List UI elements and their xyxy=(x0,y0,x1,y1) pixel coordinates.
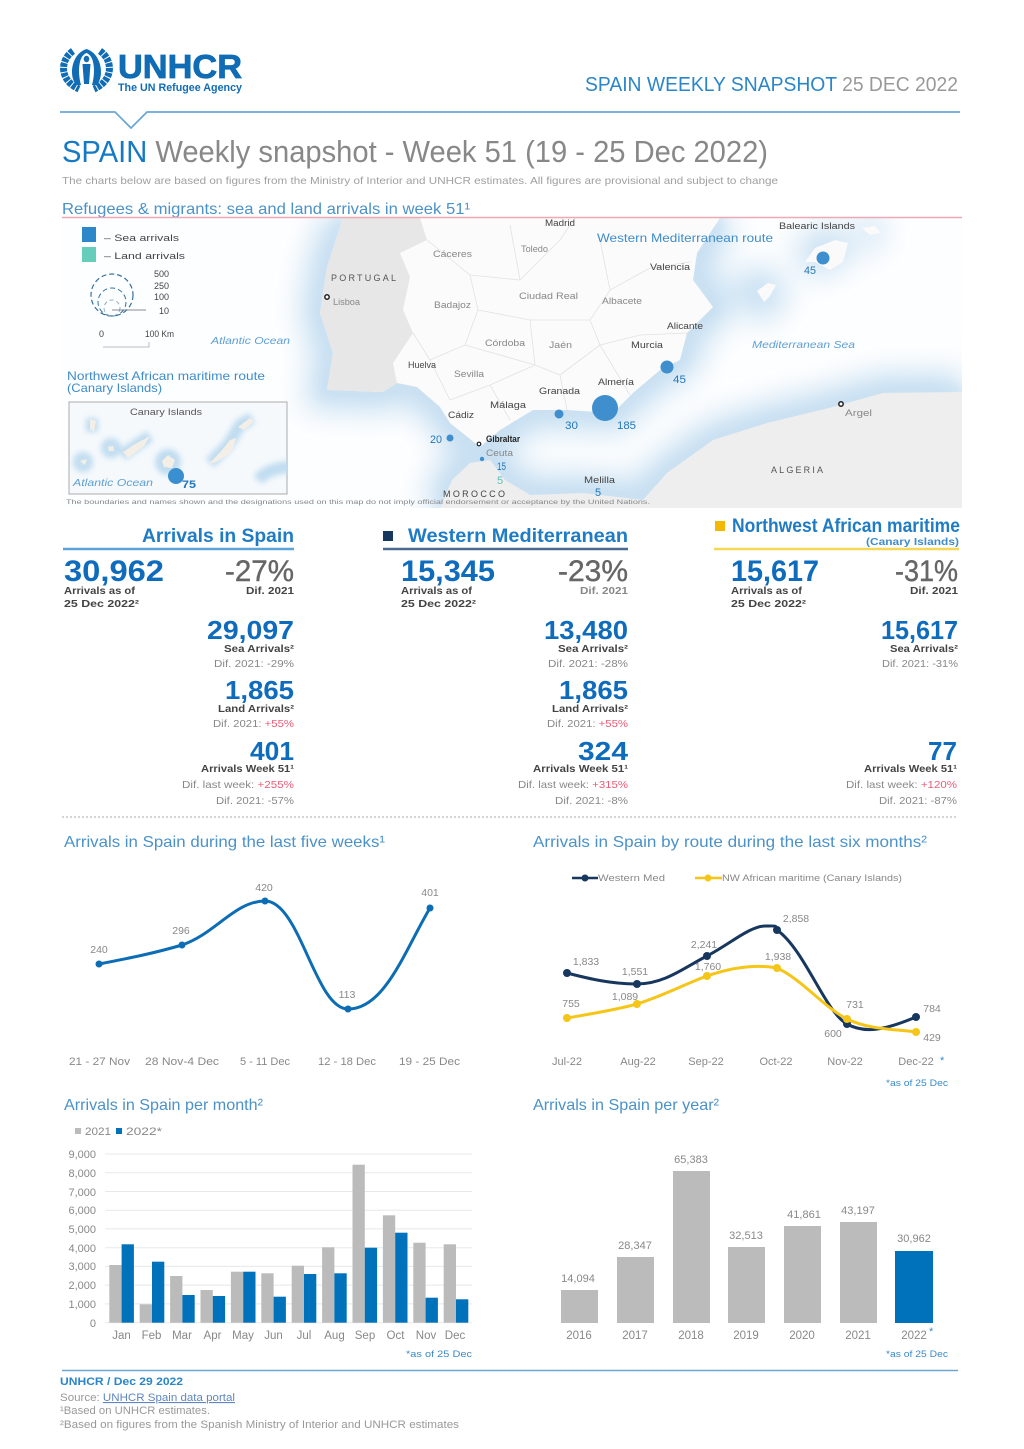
axis labels: 5 - 11 Dec xyxy=(240,1056,290,1068)
note: *as of 25 Dec xyxy=(886,1078,948,1089)
panel: Arrivals in Spain: Arrivals as of xyxy=(64,585,136,597)
values: 296 xyxy=(172,925,190,937)
panel: Canary Islands inset xyxy=(69,402,290,494)
values xyxy=(562,913,941,1044)
values: 113 xyxy=(339,989,356,1001)
year labels: 2016 xyxy=(566,1330,592,1342)
panel: Western Mediterranean: Dif. last week: +315% xyxy=(518,779,628,791)
values: 420 xyxy=(255,882,273,894)
map place labels: Atlantic Ocean xyxy=(210,335,290,347)
map arrival bubbles: 5 xyxy=(497,475,503,487)
axis labels: 19 - 25 Dec xyxy=(399,1056,461,1068)
values: 28,347 xyxy=(618,1240,652,1252)
year labels: 2018 xyxy=(678,1330,704,1342)
values: 1,938 xyxy=(765,951,791,963)
month labels: Jan xyxy=(112,1330,131,1342)
panel: Arrivals in Spain: Dif. 2021: -57% xyxy=(216,795,294,807)
map place labels: Madrid xyxy=(545,218,575,228)
difference: -27% xyxy=(225,555,294,588)
month labels: Feb xyxy=(142,1330,161,1342)
map place labels: Sevilla xyxy=(454,369,484,379)
year labels: 2017 xyxy=(622,1330,648,1342)
panel: Western Mediterranean: Arrivals Week 51¹ xyxy=(533,763,629,775)
panel: Western Mediterranean: Dif. 2021: +55% xyxy=(547,718,628,730)
weekly arrivals: 77 xyxy=(928,736,957,766)
y axis: 9,000 xyxy=(68,1149,96,1161)
sea arrivals: 29,097 xyxy=(207,615,294,645)
map place labels: Huelva xyxy=(408,360,436,370)
legend: 250 xyxy=(154,281,169,291)
values: 429 xyxy=(923,1032,941,1044)
map place labels: PORTUGAL xyxy=(331,273,396,283)
map arrival bubbles: 45 xyxy=(804,265,816,277)
map place labels: Jaén xyxy=(549,340,572,350)
values: 600 xyxy=(824,1028,842,1040)
axis labels: Nov-22 xyxy=(827,1056,863,1068)
month labels: Aug xyxy=(324,1330,345,1342)
sea glow: wide xyxy=(320,218,962,508)
legend: – Sea arrivals xyxy=(104,233,180,243)
month labels: Apr xyxy=(204,1330,222,1342)
scale bar xyxy=(99,329,174,347)
line: NW African maritime xyxy=(563,964,920,1036)
axis labels: Aug-22 xyxy=(620,1056,656,1068)
month labels: Nov xyxy=(416,1330,436,1342)
panel: Arrivals in Spain: Arrivals Week 51¹ xyxy=(201,763,295,775)
heading: Arrivals in Spain during the last five weeks¹ xyxy=(64,834,385,851)
heading: Arrivals in Spain per month² xyxy=(64,1097,264,1114)
month labels: May xyxy=(232,1330,254,1342)
values: 240 xyxy=(90,944,108,956)
axis labels xyxy=(552,1056,934,1068)
values: 1,551 xyxy=(622,966,648,978)
panel: Canary Islands inset: Canary Islands xyxy=(130,407,203,417)
map route label: Northwest African: (Canary Islands) xyxy=(67,381,162,395)
heading: Arrivals in Spain per year² xyxy=(533,1097,720,1114)
legend: 500 xyxy=(154,269,169,279)
heading: Arrivals in Spain by route during the last six months² xyxy=(533,834,928,851)
values: 2,858 xyxy=(783,913,809,925)
panel: Arrivals in Spain xyxy=(63,526,295,807)
land arrivals: 1,865 xyxy=(225,675,294,705)
legend: 2021 xyxy=(85,1126,111,1138)
legend: Western Med xyxy=(598,873,665,883)
panel: Northwest African maritime: Arrivals as of xyxy=(731,585,803,597)
footer xyxy=(60,1376,460,1431)
map place labels: Argel xyxy=(845,408,872,418)
difference: -23% xyxy=(558,555,628,588)
y axis: 5,000 xyxy=(68,1224,96,1236)
values xyxy=(561,1154,931,1285)
axis labels: 21 - 27 Nov xyxy=(69,1056,131,1068)
map place labels: Cádiz xyxy=(448,410,475,420)
panel: Western Mediterranean: Dif. 2021 xyxy=(580,585,628,597)
map arrival bubbles: 5 xyxy=(595,487,601,499)
bars xyxy=(561,1171,933,1323)
axis labels: Jul-22 xyxy=(552,1056,582,1068)
legend: NW African maritime (Canary Islands) xyxy=(722,873,902,883)
panel: Northwest African maritime: Dif. 2021 xyxy=(910,585,958,597)
year labels: 2020 xyxy=(789,1330,815,1342)
land: North Africa xyxy=(440,392,962,508)
panel: Arrivals in Spain: Dif. 2021: +55% xyxy=(213,718,294,730)
month labels: Jun xyxy=(264,1330,283,1342)
footer: ¹Based on UNHCR estimates. xyxy=(60,1405,210,1417)
weekly arrivals: 401 xyxy=(250,736,294,766)
difference: -31% xyxy=(895,555,958,588)
axis labels: 28 Nov-4 Dec xyxy=(145,1056,220,1068)
province borders xyxy=(413,218,690,420)
map route label: Northwest African xyxy=(67,369,265,395)
month labels xyxy=(112,1330,465,1342)
map place labels: Badajoz xyxy=(434,300,472,310)
map route label: Northwest African: Northwest African maritime route xyxy=(67,369,265,383)
land: Balearic Islands xyxy=(757,226,881,302)
total figure: 15,617 xyxy=(731,555,819,588)
chart: per month xyxy=(64,1097,472,1360)
heading: Western Mediterranean xyxy=(408,526,628,547)
map arrival bubbles: 45 xyxy=(673,374,686,386)
map route label: Western Mediterranean: Western Mediterranean route xyxy=(597,231,773,245)
values xyxy=(90,882,439,1001)
map place labels: Ceuta xyxy=(486,448,513,458)
values: 43,197 xyxy=(841,1205,875,1217)
map heading: Refugees & migrants: sea and land arrivals in week 51¹ xyxy=(62,201,470,218)
panel: Western Mediterranean: Sea Arrivals² xyxy=(558,643,629,655)
year labels: 2021 xyxy=(845,1330,871,1342)
values: 14,094 xyxy=(561,1273,595,1285)
panel: Arrivals in Spain: Dif. last week: +255% xyxy=(182,779,294,791)
grid lines xyxy=(105,1154,472,1323)
values: 401 xyxy=(421,887,439,899)
map place labels: Granada xyxy=(539,386,580,396)
map place labels: Mediterranean Sea xyxy=(752,339,855,351)
map place labels: ALGERIA xyxy=(771,465,823,475)
map place labels: Almería xyxy=(598,377,634,387)
values: 65,383 xyxy=(674,1154,708,1166)
panel: Northwest African maritime: Dif. 2021: -87% xyxy=(879,795,957,807)
line xyxy=(99,901,430,1009)
chart: per year: * xyxy=(929,1326,934,1338)
legend xyxy=(572,873,902,883)
month labels: Mar xyxy=(172,1330,192,1342)
map place labels: MOROCCO xyxy=(443,489,505,499)
map arrival bubbles: 185 xyxy=(617,420,636,432)
panel: Western Mediterranean: 25 Dec 2022² xyxy=(401,598,477,610)
panel: Northwest African maritime: Dif. last week: +120% xyxy=(846,779,957,791)
map place labels: Málaga xyxy=(490,400,526,410)
values: 30,962 xyxy=(897,1233,931,1245)
logo tagline: The UN Refugee Agency xyxy=(118,82,243,94)
title: SPAIN Weekly snapshot - Week 51 (19 - 25 Dec 2022) xyxy=(62,134,768,169)
chart: last five weeks xyxy=(64,834,461,1068)
bars 2022 xyxy=(122,1233,468,1323)
header rule with notch xyxy=(60,112,960,128)
heading: Northwest African maritime xyxy=(732,516,960,537)
map arrival bubbles: 15 xyxy=(497,461,506,473)
y axis: 1,000 xyxy=(68,1299,96,1311)
legend xyxy=(75,1126,163,1138)
subtitle: The charts below are based on figures from the Ministry of Interior and UNHCR estimates. All figures are provisional and subject to change xyxy=(62,175,778,187)
footer: UNHCR / Dec 29 2022 xyxy=(60,1376,183,1388)
values: 41,861 xyxy=(787,1209,821,1221)
line: Western Med xyxy=(563,926,920,1030)
sea arrivals: 13,480 xyxy=(544,615,628,645)
axis labels: Dec-22 xyxy=(898,1056,934,1068)
map place labels: Lisboa xyxy=(333,297,360,307)
map arrival bubbles xyxy=(430,252,830,499)
panel: Canary Islands inset: 75 xyxy=(182,479,196,491)
values: 1,760 xyxy=(695,961,721,973)
icon: UNHCR emblem xyxy=(64,49,109,89)
year labels: 2022 xyxy=(901,1330,927,1342)
panel: Arrivals in Spain: Land Arrivals² xyxy=(218,703,295,715)
icon: navy square xyxy=(383,531,393,541)
panel: Western Mediterranean: Land Arrivals² xyxy=(552,703,629,715)
map place labels: Córdoba xyxy=(485,338,525,348)
map place labels: Melilla xyxy=(584,475,615,485)
panel: Northwest African maritime: (Canary Islands) xyxy=(866,536,959,548)
map arrival bubbles: 30 xyxy=(565,420,578,432)
legend: 10 xyxy=(159,306,169,316)
axis labels xyxy=(69,1056,461,1068)
map arrival bubbles: 20 xyxy=(430,434,442,446)
map place labels: Alicante xyxy=(667,321,703,331)
axis labels: Oct-22 xyxy=(759,1056,793,1068)
map place labels: Balearic Islands xyxy=(779,221,856,231)
panel: Arrivals in Spain: 25 Dec 2022² xyxy=(64,598,140,610)
map place labels xyxy=(210,218,872,499)
land: Portugal xyxy=(320,218,427,392)
panel: Arrivals in Spain: Dif. 2021: -29% xyxy=(214,658,294,670)
total figure: 15,345 xyxy=(401,555,495,588)
y axis: 7,000 xyxy=(68,1187,96,1199)
values: 1,833 xyxy=(573,956,599,968)
icon: yellow square xyxy=(715,521,725,531)
map place labels: Toledo xyxy=(521,244,548,254)
scale bar: 0 xyxy=(99,329,104,339)
panel: Northwest African maritime: Arrivals Week 51¹ xyxy=(864,763,958,775)
legend: 2022* xyxy=(126,1126,163,1138)
year labels: 2019 xyxy=(733,1330,759,1342)
axis labels: Sep-22 xyxy=(688,1056,724,1068)
bars 2021 xyxy=(109,1165,456,1323)
month labels: Dec xyxy=(445,1330,465,1342)
note: *as of 25 Dec xyxy=(886,1349,948,1360)
y axis: 0 xyxy=(90,1318,96,1330)
panel: Northwest African maritime: Dif. 2021: -31% xyxy=(882,658,958,670)
panel: Canary Islands inset: Atlantic Ocean xyxy=(72,477,153,489)
land: Iberia xyxy=(320,218,720,447)
y axis: 4,000 xyxy=(68,1243,96,1255)
panel: Western Mediterranean xyxy=(383,526,629,807)
map place labels: Valencia xyxy=(650,262,690,272)
month labels: Oct xyxy=(387,1330,405,1342)
map place labels: Albacete xyxy=(602,296,642,306)
chart: per year xyxy=(533,1097,948,1360)
axis labels: 12 - 18 Dec xyxy=(318,1056,376,1068)
footer: ²Based on figures from the Spanish Ministry of Interior and UNHCR estimates xyxy=(60,1419,460,1431)
map place labels: Gibraltar xyxy=(486,434,520,444)
sea arrivals: 15,617 xyxy=(881,615,958,645)
note: *as of 25 Dec xyxy=(406,1349,472,1360)
values: 784 xyxy=(923,1003,941,1015)
weekly arrivals: 324 xyxy=(578,736,629,766)
month labels: Sep xyxy=(355,1330,375,1342)
panel: Western Mediterranean: Arrivals as of xyxy=(401,585,473,597)
panel: Western Mediterranean: Dif. 2021: -28% xyxy=(548,658,628,670)
legend xyxy=(82,227,186,316)
panel: Western Mediterranean: Dif. 2021: -8% xyxy=(555,795,628,807)
heading: Arrivals in Spain xyxy=(142,526,294,547)
chart: by route last six months: * xyxy=(940,1055,945,1067)
year labels xyxy=(566,1330,927,1342)
map place labels: Ciudad Real xyxy=(519,291,578,301)
panel: Northwest African maritime: 25 Dec 2022² xyxy=(731,598,807,610)
chart: by route last six months xyxy=(533,834,948,1089)
y axis xyxy=(68,1149,96,1330)
land arrivals: 1,865 xyxy=(559,675,628,705)
panel: Arrivals in Spain: Dif. 2021 xyxy=(246,585,294,597)
month labels: Jul xyxy=(297,1330,311,1342)
panel: Northwest African maritime: Sea Arrivals² xyxy=(890,643,959,655)
panel: Northwest African maritime xyxy=(714,516,960,807)
footer: Source: UNHCR Spain data portal xyxy=(60,1392,235,1404)
y axis: 6,000 xyxy=(68,1205,96,1217)
panel: map xyxy=(62,218,962,508)
sea glow: near coast xyxy=(320,218,962,508)
total figure: 30,962 xyxy=(64,555,164,588)
legend: – Land arrivals xyxy=(104,251,186,261)
header label: SPAIN WEEKLY SNAPSHOT 25 DEC 2022 xyxy=(585,74,958,96)
scale bar: 100 Km xyxy=(145,329,174,339)
panel: Arrivals in Spain: Sea Arrivals² xyxy=(224,643,295,655)
map disclaimer: The boundaries and names shown and the designations used on this map do not imply official endorsement or acceptance by the United Nations. xyxy=(66,499,650,506)
values: 32,513 xyxy=(729,1230,763,1242)
logo: UNHCR xyxy=(64,48,243,94)
y axis: 8,000 xyxy=(68,1168,96,1180)
map place labels: Murcia xyxy=(631,340,663,350)
values: 2,241 xyxy=(691,939,717,951)
logo wordmark: UNHCR xyxy=(118,48,242,85)
map place labels: Cáceres xyxy=(433,249,473,259)
legend: 100 xyxy=(154,292,169,302)
y axis: 2,000 xyxy=(68,1280,96,1292)
values: 1,089 xyxy=(612,991,638,1003)
values: 731 xyxy=(846,999,864,1011)
y axis: 3,000 xyxy=(68,1261,96,1273)
values: 755 xyxy=(562,998,580,1010)
